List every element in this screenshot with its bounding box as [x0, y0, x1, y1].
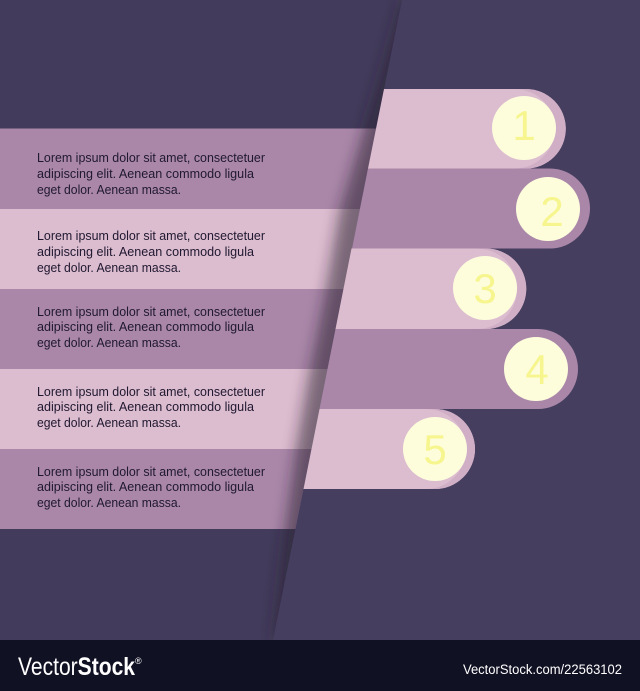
- icon: number circle 5: [403, 417, 467, 481]
- icon: number circle 5: 5: [423, 426, 447, 473]
- panel: left bar 3: Lorem ipsum dolor sit amet, consectetuer: [37, 305, 265, 319]
- panel: left bar 4: adipiscing elit. Aenean commodo ligula: [37, 400, 254, 414]
- icon: number circle 4: 4: [525, 346, 549, 393]
- panel: left bar 3: [0, 289, 344, 369]
- icon: number circle 1: [492, 96, 556, 160]
- panel: left bar 4: [0, 369, 328, 449]
- icon: number circle 3: 3: [473, 265, 497, 312]
- panel: left bar 1: Lorem ipsum dolor sit amet, consectetuer: [37, 151, 265, 165]
- panel: left bar 2: [0, 209, 400, 289]
- panel: left bar 3: adipiscing elit. Aenean commodo ligula: [37, 320, 254, 334]
- panel: right bar 5: [304, 409, 475, 489]
- panel: right bar 3: [336, 248, 526, 329]
- panel: left bar 5: Lorem ipsum dolor sit amet, consectetuer: [37, 465, 265, 479]
- panel: left bar 4: eget dolor. Aenean massa.: [37, 416, 181, 430]
- panel: left bar 2: adipiscing elit. Aenean commodo ligula: [37, 245, 254, 259]
- panel: footer: [0, 640, 640, 691]
- panel: left bar 5: eget dolor. Aenean massa.: [37, 496, 181, 510]
- panel: right bar 1: [368, 89, 566, 168]
- panel: right bar 4: [320, 329, 578, 409]
- image id: VectorStock.com/22563102: [463, 662, 622, 677]
- panel: left bar 1: adipiscing elit. Aenean commodo ligula: [37, 167, 254, 181]
- icon: number circle 1: 1: [512, 102, 536, 149]
- fold shadow: [271, 1, 402, 637]
- panel: left bar 3: eget dolor. Aenean massa.: [37, 336, 181, 350]
- panel: left bar 5: adipiscing elit. Aenean commodo ligula: [37, 480, 254, 494]
- icon: number circle 2: 2: [540, 188, 564, 235]
- icon: number circle 2: [516, 177, 580, 241]
- panel: left bar 2: eget dolor. Aenean massa.: [37, 261, 181, 275]
- watermark logo: VectorStock: [18, 653, 135, 681]
- panel: left bar 1: eget dolor. Aenean massa.: [37, 183, 181, 197]
- panel: left bar 1: [0, 128, 400, 209]
- panel: left page: [0, 0, 420, 640]
- panel: right bar 2: [352, 168, 590, 248]
- panel: left bar 5: [0, 449, 312, 529]
- panel: left bar 2: Lorem ipsum dolor sit amet, consectetuer: [37, 229, 265, 243]
- icon: number circle 4: [504, 337, 568, 401]
- registered mark: ®: [135, 656, 142, 666]
- icon: number circle 3: [453, 256, 517, 320]
- panel: left bar 4: Lorem ipsum dolor sit amet, consectetuer: [37, 385, 265, 399]
